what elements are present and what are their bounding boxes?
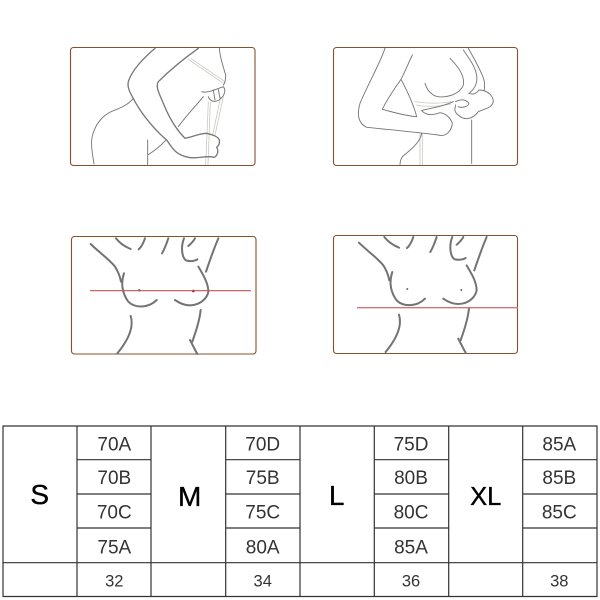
size XL column: 85A <box>542 434 577 456</box>
illustration: front view with tape <box>358 48 493 165</box>
panel: measuring under bust <box>334 48 518 166</box>
size M column: M <box>178 481 201 512</box>
size XL column: 85B <box>542 468 576 489</box>
size L column: 85A <box>394 538 428 558</box>
size S column: 70B <box>97 468 131 489</box>
size M column: 80A <box>246 538 280 558</box>
panel: bust line measure <box>72 236 256 354</box>
size S column: 70A <box>97 434 132 456</box>
panel: under bust line measure <box>334 236 518 354</box>
size L column: 75D <box>394 434 428 456</box>
size S column: 32 <box>105 572 123 590</box>
size XL column <box>470 434 577 590</box>
size XL column: 85C <box>542 502 577 524</box>
size M column <box>178 434 280 590</box>
illustration: torso outline <box>359 237 487 353</box>
size S column: S <box>30 479 49 510</box>
size L column: 80C <box>394 502 428 524</box>
measure line: under bust <box>357 307 518 309</box>
size L column: 36 <box>402 572 420 590</box>
size S column <box>30 434 132 590</box>
measure line: bust <box>90 290 251 292</box>
panel: measuring bust from the side <box>70 48 255 166</box>
size M column: 75C <box>245 502 280 524</box>
size XL column: XL <box>470 483 501 511</box>
size L column: L <box>329 480 344 511</box>
size M column: 75B <box>246 468 280 489</box>
size XL column: 38 <box>550 572 568 590</box>
size S column: 75A <box>97 538 132 558</box>
illustration: torso outline <box>91 238 218 354</box>
size chart table <box>3 426 597 596</box>
size L column: 80B <box>394 468 428 489</box>
size M column: 70D <box>245 434 280 456</box>
size L column <box>329 434 428 590</box>
illustration: side view with tape <box>92 48 226 165</box>
size M column: 34 <box>254 572 272 590</box>
size S column: 70C <box>97 502 132 524</box>
